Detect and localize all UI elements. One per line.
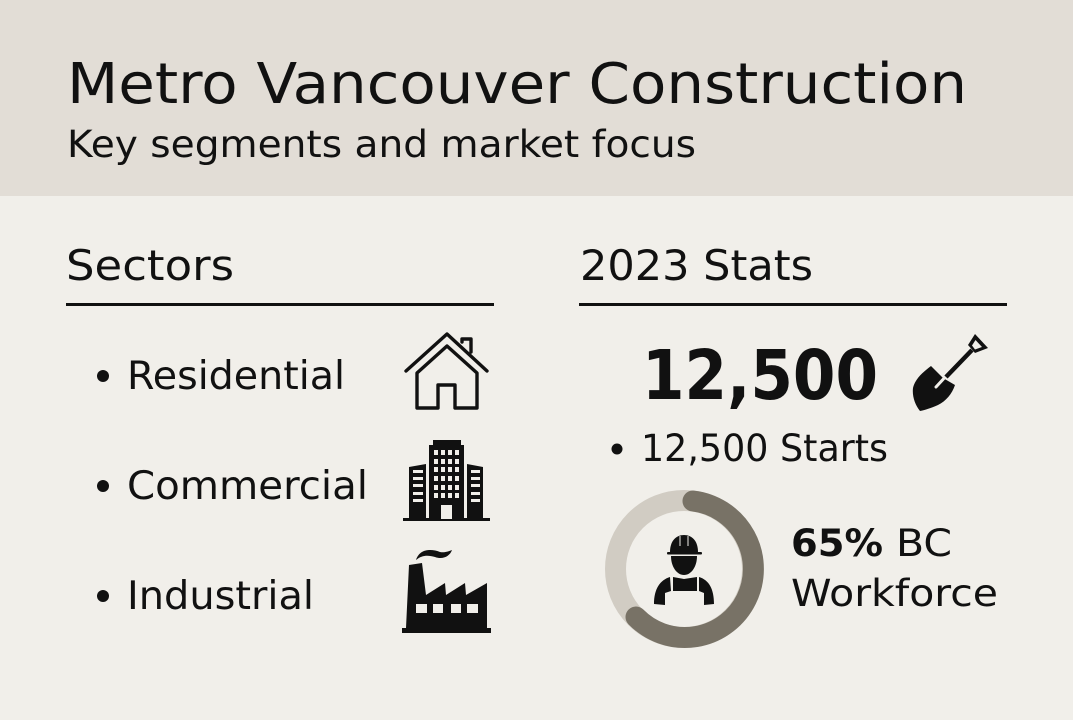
list item: commercial: Commercial (127, 464, 368, 509)
big number: 12,500 (642, 336, 878, 416)
list item: industrial: Industrial (127, 574, 314, 619)
icon: shovel (913, 334, 988, 411)
stat: workforce: Workforce (791, 572, 998, 615)
stat: workforce (791, 522, 998, 615)
header band (0, 0, 1073, 196)
list item: residential: Residential (127, 354, 345, 399)
donut chart: 65% (616, 500, 753, 638)
icon: house (406, 334, 487, 408)
stat: workforce: 65% (791, 522, 883, 565)
panel: 2023 stats (579, 241, 1007, 638)
icon: office buildings (403, 440, 490, 521)
stat: workforce: BC (896, 522, 952, 565)
subtitle: Key segments and market focus (67, 123, 696, 166)
icon: factory (402, 550, 491, 633)
sectors heading: Sectors (66, 241, 234, 290)
list item: starts: 12,500 Starts (641, 427, 888, 470)
stats heading: 2023 Stats (580, 241, 813, 290)
panel: sectors (66, 241, 494, 633)
title: Metro Vancouver Construction (67, 52, 967, 117)
icon: worker (654, 535, 714, 605)
